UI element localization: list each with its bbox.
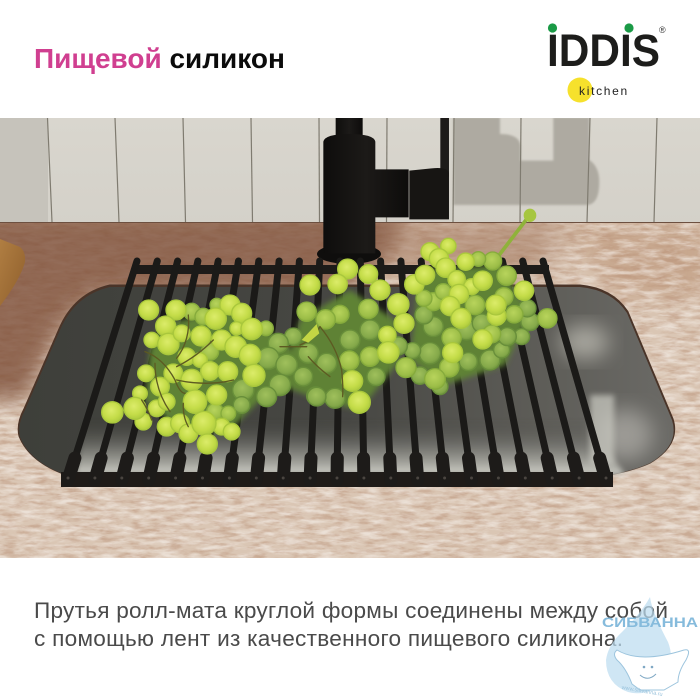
grape cluster shadow backing — [145, 265, 530, 435]
watermark face — [640, 666, 656, 678]
faucet lever — [440, 118, 449, 174]
faucet neck — [336, 118, 363, 135]
top connecting strip — [133, 265, 549, 274]
watermark url: www.sibvanna.ru — [620, 685, 663, 698]
watermark: sibvanna — [602, 597, 698, 698]
watermark bathtub — [614, 650, 689, 690]
bottom connecting strip — [61, 472, 613, 487]
grapes: right bunch — [297, 209, 557, 413]
grapes: middle and left bunch — [102, 295, 343, 454]
rods — [73, 258, 602, 454]
marble countertop — [0, 210, 700, 558]
description line 2: с помощью лент из качественного пищевого силикона. — [34, 626, 623, 651]
rod end knobs — [68, 458, 606, 480]
steel sink bowl — [19, 286, 674, 475]
silicone roll mat — [61, 261, 613, 487]
photo: sink with roll mat and grapes — [0, 110, 700, 558]
faucet body — [323, 134, 409, 253]
yellow blob — [568, 78, 592, 102]
faucet base ring — [317, 248, 381, 264]
kitchen label: kitchen — [579, 84, 629, 98]
middle bunch grapes — [297, 259, 421, 413]
title: Пищевой силикон — [34, 43, 285, 74]
logo wordmark: IDDIS — [547, 25, 660, 76]
grape stalk — [500, 220, 526, 254]
faucet handle — [409, 168, 449, 219]
watermark droplet — [606, 597, 671, 693]
cutting board — [0, 239, 25, 306]
description text — [34, 598, 668, 651]
logo green dots — [548, 23, 634, 33]
tiled wall — [0, 117, 700, 224]
description line 1: Прутья ролл-мата круглой формы соединены между собой — [34, 598, 668, 623]
watermark name: СИБВАННА — [602, 615, 698, 630]
registered mark: ® — [659, 25, 666, 35]
faucet — [317, 110, 449, 264]
pale grape stem highlight — [302, 324, 319, 343]
logo: iddis kitchen — [547, 23, 666, 102]
grape stems — [142, 315, 343, 427]
